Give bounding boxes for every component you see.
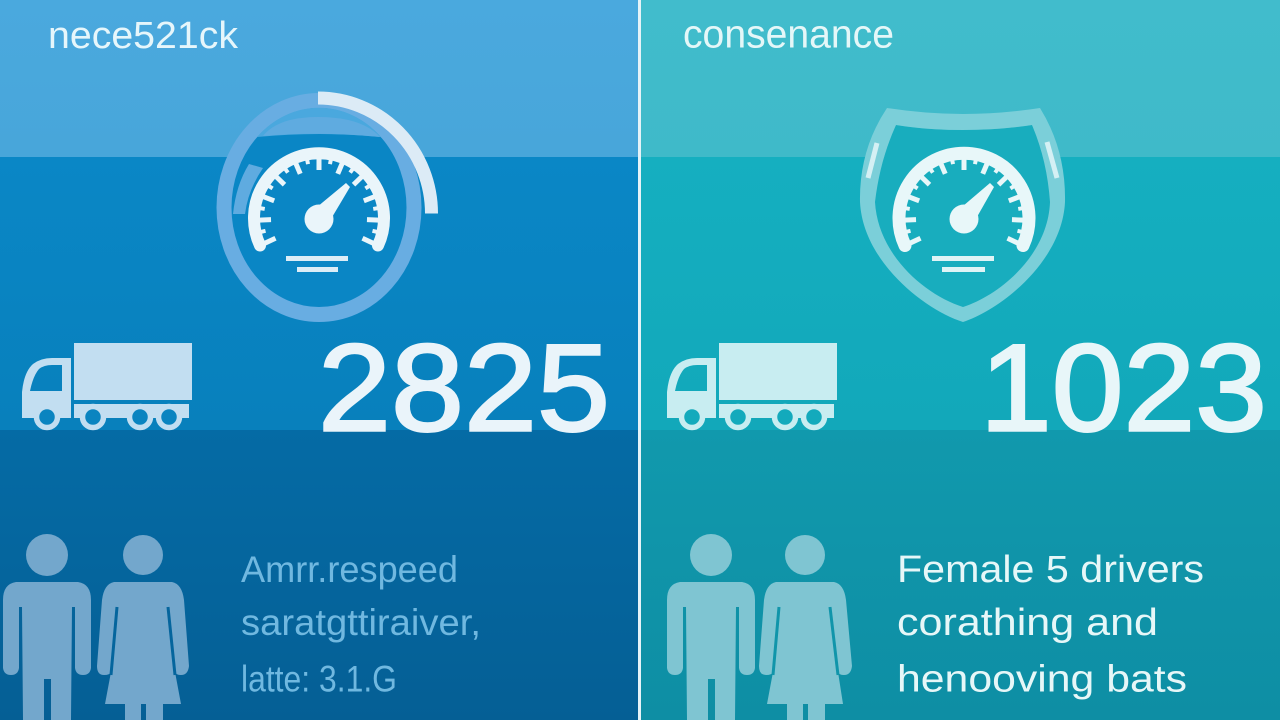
right heading: consenance: [683, 12, 894, 56]
icon: left woman: [97, 535, 189, 720]
wheels: [682, 406, 824, 428]
cab: [667, 358, 716, 418]
right big number: 1023: [980, 320, 1267, 458]
right text block: Female 5 drivers: [897, 549, 1204, 591]
inner left arc accent: [233, 164, 263, 214]
panel: left blue column: [0, 0, 638, 720]
right text block: [897, 549, 1204, 700]
icon: left man: [3, 534, 91, 720]
cargo box: [719, 343, 837, 400]
right text block: corathing and: [897, 602, 1158, 644]
panel: right teal column: [641, 0, 1280, 720]
left big number: 2825: [318, 320, 610, 458]
inner top arc accent: [263, 117, 380, 137]
left text block: [241, 549, 481, 700]
shield outline: [860, 108, 1065, 322]
wheels: [36, 406, 180, 428]
left text block: latte: 3.1.G: [241, 658, 397, 700]
dial: [254, 153, 384, 247]
left heading: nece521ck: [48, 15, 239, 57]
shield highlights: [868, 142, 1057, 178]
dial: [899, 153, 1029, 247]
shield interior: [875, 125, 1050, 307]
chassis: [719, 404, 834, 418]
column divider: [638, 0, 641, 720]
cab: [22, 358, 71, 418]
icon: right speedometer in shield: [860, 108, 1065, 322]
icon: right truck: [667, 343, 837, 428]
progress ring: [224, 100, 414, 314]
dial base lines: [286, 256, 348, 272]
chassis: [74, 404, 189, 418]
right text block: henooving bats: [897, 658, 1187, 700]
icon: left speedometer in ring: [224, 98, 432, 314]
icon: right man: [667, 534, 755, 720]
left text block: Amrr.respeed: [241, 549, 458, 590]
inner top cap: [257, 108, 381, 137]
cargo box: [74, 343, 192, 400]
icon: left truck: [22, 343, 192, 428]
highlighted progress arc: [318, 98, 432, 214]
dial base lines: [932, 256, 994, 272]
left text block: saratgttiraiver,: [241, 602, 481, 643]
icon: right woman: [759, 535, 852, 720]
